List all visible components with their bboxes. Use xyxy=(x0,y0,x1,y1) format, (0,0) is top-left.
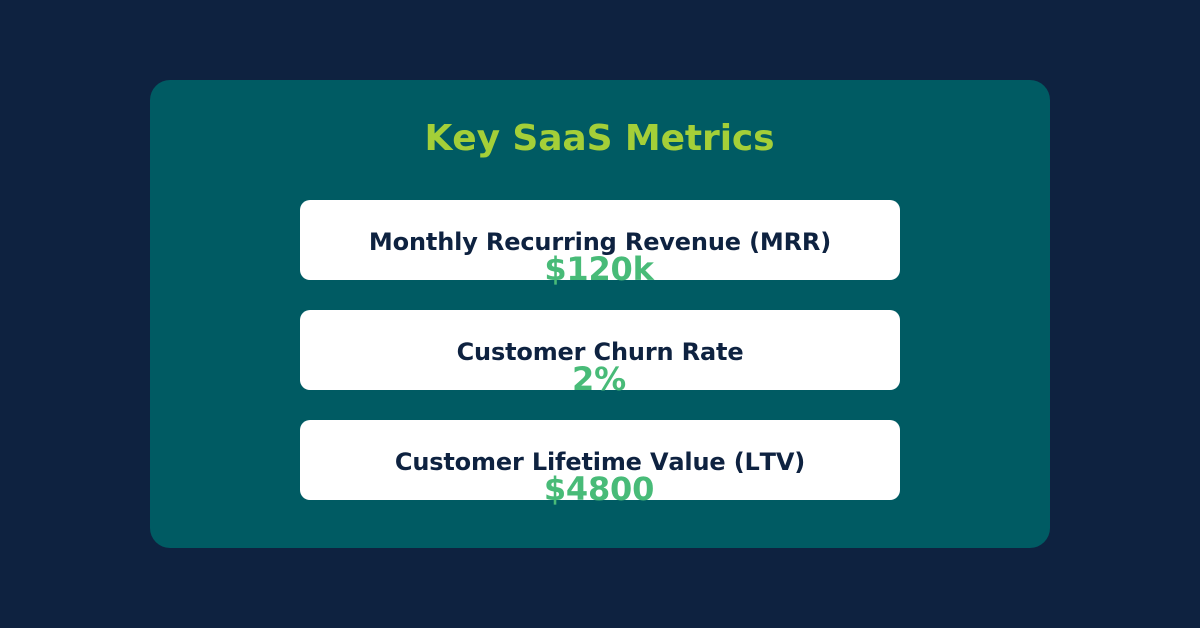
card: customer churn rate xyxy=(300,310,900,390)
card: monthly recurring revenue: $120k xyxy=(544,250,654,288)
card: monthly recurring revenue: Monthly Recurring Revenue (MRR) xyxy=(369,228,831,256)
card: customer churn rate: 2% xyxy=(572,360,626,398)
card: customer churn rate: Customer Churn Rate xyxy=(457,338,743,366)
card: customer lifetime value xyxy=(300,420,900,500)
panel: key metrics xyxy=(150,80,1050,548)
card: customer lifetime value: $4800 xyxy=(544,470,654,508)
card: monthly recurring revenue xyxy=(300,200,900,280)
card: customer lifetime value: Customer Lifetime Value (LTV) xyxy=(395,448,805,476)
title: Key SaaS Metrics xyxy=(424,118,774,159)
